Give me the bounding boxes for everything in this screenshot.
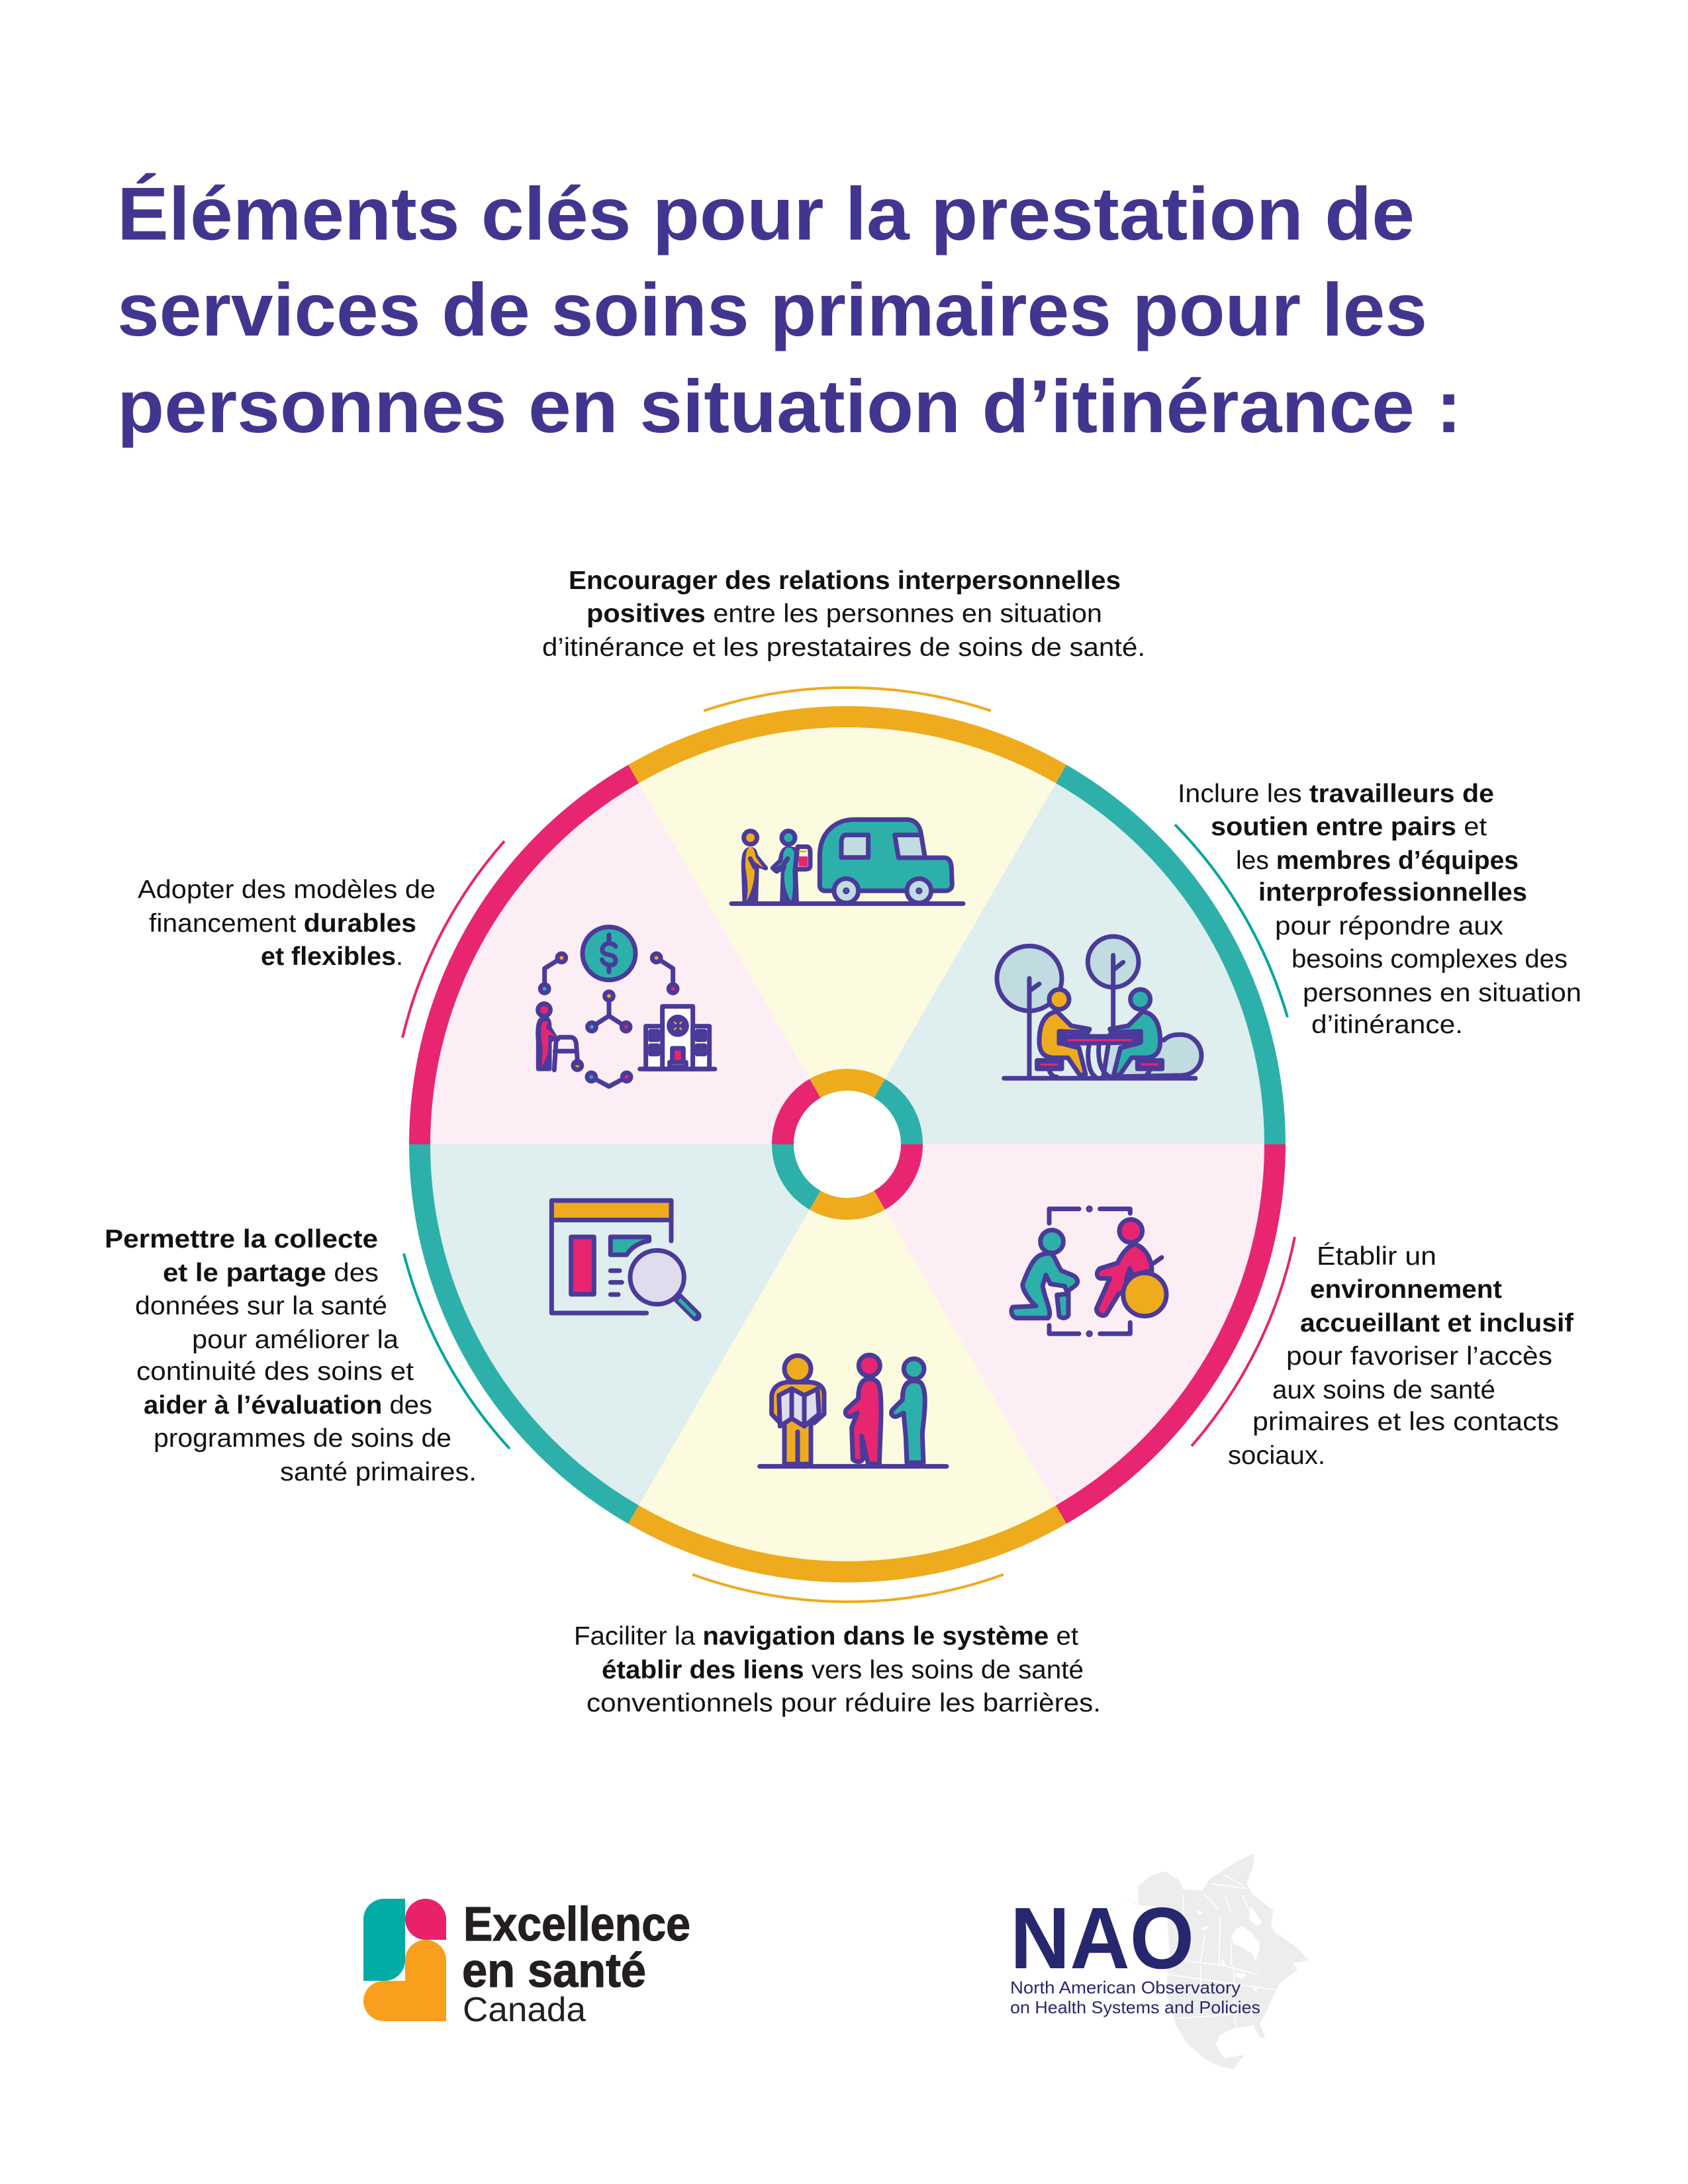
- text: lower left: et le partage des: [163, 1259, 379, 1287]
- title: [117, 172, 1462, 448]
- icon: van and two people: [731, 819, 963, 903]
- title: services de soins primaires pour les: [117, 268, 1427, 351]
- text: top: d’itinérance et les prestataires de soins de santé.: [542, 633, 1145, 662]
- text: lower right: Établir un: [1317, 1242, 1436, 1271]
- icon: data dashboard with magnifier: [551, 1201, 696, 1316]
- text: upper right: soutien entre pairs et: [1211, 813, 1487, 841]
- text: lower right: [1228, 1242, 1574, 1470]
- centre hub: [782, 1079, 912, 1209]
- text: lower left: santé primaires.: [280, 1458, 477, 1486]
- logo: NAO: NAO: [1010, 1889, 1194, 1987]
- logo: Excellence en santé Canada: en santé: [462, 1944, 646, 1997]
- text: bottom: [574, 1622, 1101, 1717]
- text: lower right: aux soins de santé: [1272, 1376, 1495, 1404]
- thin outer arcs: [402, 688, 1295, 1602]
- icon: people navigating with a map: [760, 1355, 947, 1467]
- text: upper right: interprofessionnelles: [1258, 878, 1527, 907]
- logo: NAO: North American Observatory: [1010, 1978, 1241, 1997]
- logo: NAO: on Health Systems and Policies: [1010, 1997, 1260, 2017]
- text: lower left: données sur la santé: [135, 1292, 387, 1320]
- title: personnes en situation d’itinérance :: [117, 365, 1462, 448]
- logo: Excellence en santé Canada: Canada: [463, 1991, 586, 2029]
- text: top: positives entre les personnes en situation: [586, 600, 1102, 628]
- text: lower right: sociaux.: [1228, 1441, 1325, 1470]
- text: upper right: Inclure les travailleurs de: [1178, 780, 1494, 808]
- icon: funding network: [538, 927, 715, 1087]
- text: bottom: Faciliter la navigation dans le système et: [574, 1622, 1078, 1651]
- text: lower right: pour favoriser l’accès: [1286, 1342, 1552, 1371]
- text: upper left: Adopter des modèles de: [138, 876, 436, 904]
- text: lower right: primaires et les contacts: [1252, 1408, 1559, 1436]
- logo: NAO: [1010, 1853, 1309, 2070]
- icon: two people at a park table: [997, 936, 1201, 1078]
- text: bottom: conventionnels pour réduire les barrières.: [586, 1689, 1101, 1717]
- logo: Excellence en santé Canada: [363, 1898, 690, 2029]
- text: upper right: besoins complexes des: [1291, 945, 1568, 974]
- text: lower left: [105, 1225, 477, 1486]
- text: upper right: [1178, 780, 1581, 1039]
- text: lower left: pour améliorer la: [192, 1326, 399, 1354]
- text: upper right: pour répondre aux: [1275, 912, 1504, 940]
- text: lower left: Permettre la collecte: [105, 1225, 378, 1253]
- wedge backgrounds: [409, 706, 1286, 1582]
- text: upper right: d’itinérance.: [1311, 1011, 1463, 1039]
- text: upper right: les membres d’équipes: [1236, 846, 1519, 875]
- text: top: [542, 567, 1145, 662]
- text: upper left: financement durables: [149, 909, 416, 938]
- text: lower right: environnement: [1310, 1275, 1502, 1304]
- wheel diagram: [402, 688, 1295, 1602]
- text: top: Encourager des relations interpersonnelles: [569, 567, 1121, 595]
- text: lower right: accueillant et inclusif: [1300, 1309, 1574, 1338]
- icon: welcoming environment, wheelchair user: [1011, 1208, 1166, 1335]
- text: upper left: [138, 876, 436, 971]
- text: lower left: continuité des soins et: [136, 1357, 414, 1386]
- text: upper right: personnes en situation: [1303, 979, 1581, 1007]
- outer ring: [420, 717, 1275, 1572]
- text: upper left: et flexibles.: [261, 942, 403, 971]
- text: lower left: aider à l’évaluation des: [144, 1391, 432, 1420]
- text: bottom: établir des liens vers les soins de santé: [602, 1656, 1084, 1684]
- logo mark: [363, 1899, 446, 2021]
- logo: Excellence en santé Canada: Excellence: [463, 1898, 690, 1951]
- text: lower left: programmes de soins de: [154, 1424, 451, 1453]
- map of North America: [1121, 1853, 1309, 2070]
- title: Éléments clés pour la prestation de: [117, 172, 1415, 255]
